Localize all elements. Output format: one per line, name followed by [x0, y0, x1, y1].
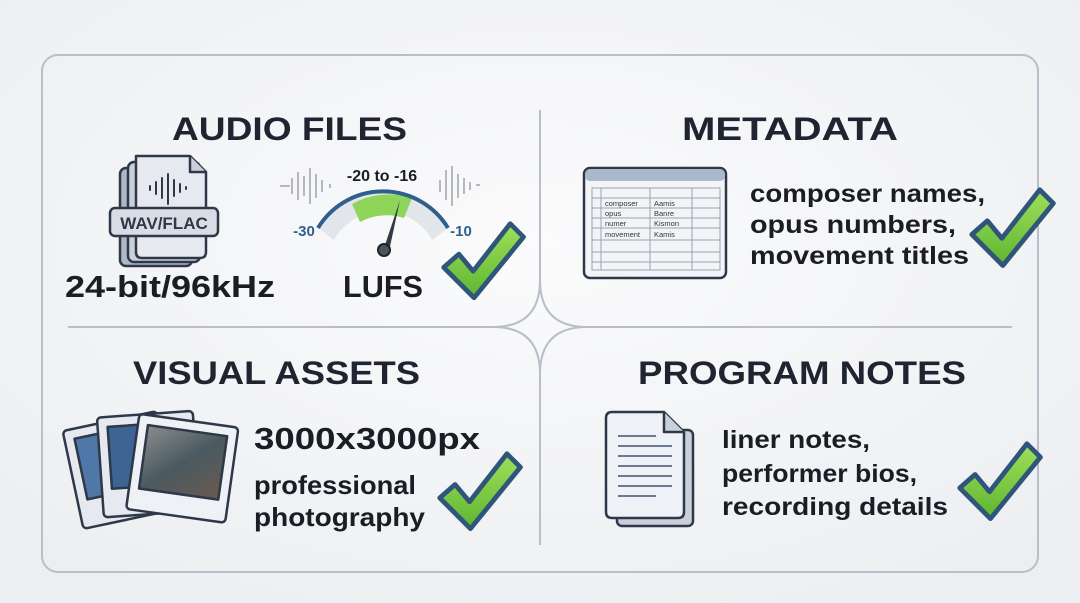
icon: check: [972, 190, 1053, 265]
icon: LUFS meter: [280, 166, 480, 256]
icon: photos: [63, 411, 238, 529]
dividers: [68, 110, 1012, 545]
text: program notes list: [722, 426, 948, 521]
text: metadata list: [750, 180, 985, 270]
panel: audio files: [65, 111, 524, 304]
text: program notes list: liner notes,: [722, 426, 870, 454]
heading: program notes: PROGRAM NOTES: [638, 355, 966, 391]
icon: spreadsheet: opus: [605, 209, 622, 218]
icon: spreadsheet: movement: [605, 230, 641, 239]
icon: spreadsheet: Aamis: [654, 199, 675, 208]
text: visual specs: 3000x3000px: [254, 421, 481, 456]
icon: check: [960, 444, 1040, 519]
icon: spreadsheet: composer: [605, 199, 638, 208]
icon: check: [440, 454, 520, 529]
heading: visual assets: VISUAL ASSETS: [133, 355, 420, 391]
icon: LUFS meter: -30: [293, 223, 315, 240]
icon: documents: [606, 412, 693, 526]
text: metadata list: composer names,: [750, 180, 985, 208]
panel: audio files: WAV/FLAC: [120, 214, 208, 233]
icon: LUFS meter: -10: [450, 223, 472, 240]
icon: wav/flac file: [110, 156, 218, 266]
text: metadata list: movement titles: [750, 242, 969, 270]
text: program notes list: recording details: [722, 493, 948, 521]
icon: spreadsheet: numer: [605, 219, 627, 228]
icon: LUFS meter: -20 to -16: [347, 168, 417, 185]
text: program notes list: performer bios,: [722, 460, 917, 488]
panel: visual assets: photography: [254, 502, 426, 532]
panel: visual assets: professional: [254, 470, 416, 500]
icon: spreadsheet: Kismon: [654, 219, 679, 228]
heading: audio files: AUDIO FILES: [172, 111, 407, 147]
panel: metadata: [584, 111, 1053, 278]
outer frame: [42, 55, 1038, 572]
text: metadata list: opus numbers,: [750, 211, 956, 239]
icon: spreadsheet: [584, 168, 726, 278]
panel: visual assets: [63, 355, 520, 532]
text: 24-bit/96kHz: 24-bit/96kHz: [65, 269, 275, 304]
icon: check: [444, 224, 524, 298]
heading: metadata: METADATA: [682, 111, 898, 147]
text: LUFS: LUFS: [343, 269, 423, 304]
panel: program notes: [606, 355, 1040, 526]
icon: spreadsheet: Kamis: [654, 230, 675, 239]
icon: spreadsheet: Banre: [654, 209, 674, 218]
